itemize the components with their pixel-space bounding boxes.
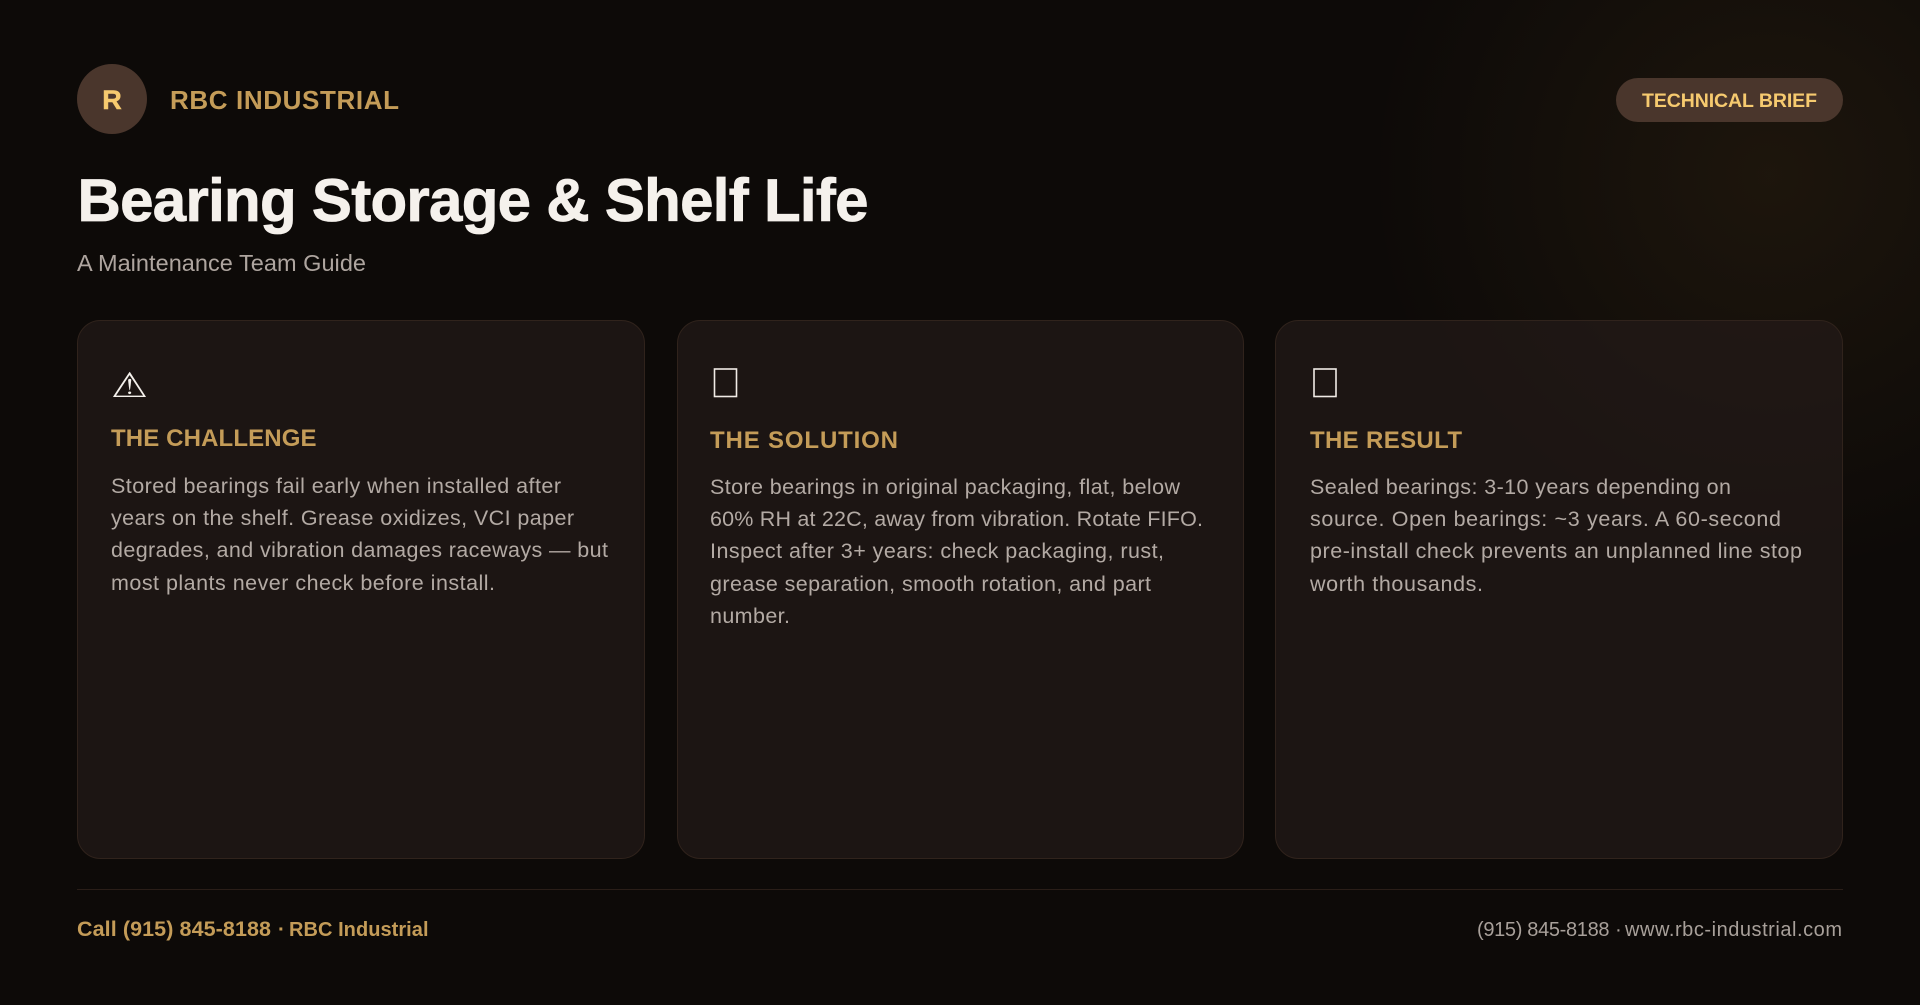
challenge body text: degrades, and vibration damages raceways — but xyxy=(111,538,608,562)
challenge body text xyxy=(111,474,608,595)
result body text: Sealed bearings: 3-10 years depending on xyxy=(1310,475,1731,499)
heading: the result: THE RESULT xyxy=(1310,427,1462,454)
challenge body text: Stored bearings fail early when installed after xyxy=(111,474,561,498)
solution body text xyxy=(710,475,1203,628)
footer contact details xyxy=(1477,918,1842,941)
solution body text: 60% RH at 22C, away from vibration. Rotate FIFO. xyxy=(710,507,1203,531)
solution body text: grease separation, smooth rotation, and part xyxy=(710,572,1151,596)
solution body text: number. xyxy=(710,604,790,628)
icon: missing glyph box xyxy=(1314,369,1336,396)
subtitle: A Maintenance Team Guide xyxy=(77,250,366,276)
heading: the solution: THE SOLUTION xyxy=(710,427,898,454)
panel: the result xyxy=(1276,320,1842,858)
challenge body text: most plants never check before install. xyxy=(111,571,495,595)
footer call to action: Call (915) 845-8188 xyxy=(77,917,271,941)
challenge body text: years on the shelf. Grease oxidizes, VCI paper xyxy=(111,506,574,530)
footer call to action: RBC Industrial xyxy=(289,919,428,941)
result body text: worth thousands. xyxy=(1309,572,1483,596)
badge: technical brief: TECHNICAL BRIEF xyxy=(1642,90,1817,112)
title: Bearing Storage & Shelf Life xyxy=(78,167,868,234)
footer call to action xyxy=(77,917,428,941)
logo circle with initial xyxy=(77,64,147,134)
footer contact details: www.rbc-industrial.com xyxy=(1624,919,1842,941)
badge: technical brief xyxy=(1616,78,1843,122)
footer contact details: (915) 845-8188 xyxy=(1477,919,1610,941)
result body text xyxy=(1309,475,1802,596)
footer call to action: · xyxy=(278,918,285,941)
icon: warning triangle: ⚠ xyxy=(111,365,148,405)
result body text: source. Open bearings: ~3 years. A 60-second xyxy=(1310,507,1781,531)
heading: the challenge: THE CHALLENGE xyxy=(111,425,316,452)
header: brand logo and name xyxy=(77,64,399,134)
panel: the challenge xyxy=(78,320,644,858)
result body text: pre-install check prevents an unplanned line stop xyxy=(1310,539,1802,563)
logo circle with initial: R xyxy=(102,85,122,115)
footer contact details: · xyxy=(1615,918,1622,941)
brand name: RBC INDUSTRIAL xyxy=(170,85,399,115)
solution body text: Store bearings in original packaging, flat, below xyxy=(710,475,1180,499)
solution body text: Inspect after 3+ years: check packaging, rust, xyxy=(710,539,1164,563)
icon: missing glyph box xyxy=(714,369,736,396)
panel: the solution xyxy=(678,320,1244,858)
